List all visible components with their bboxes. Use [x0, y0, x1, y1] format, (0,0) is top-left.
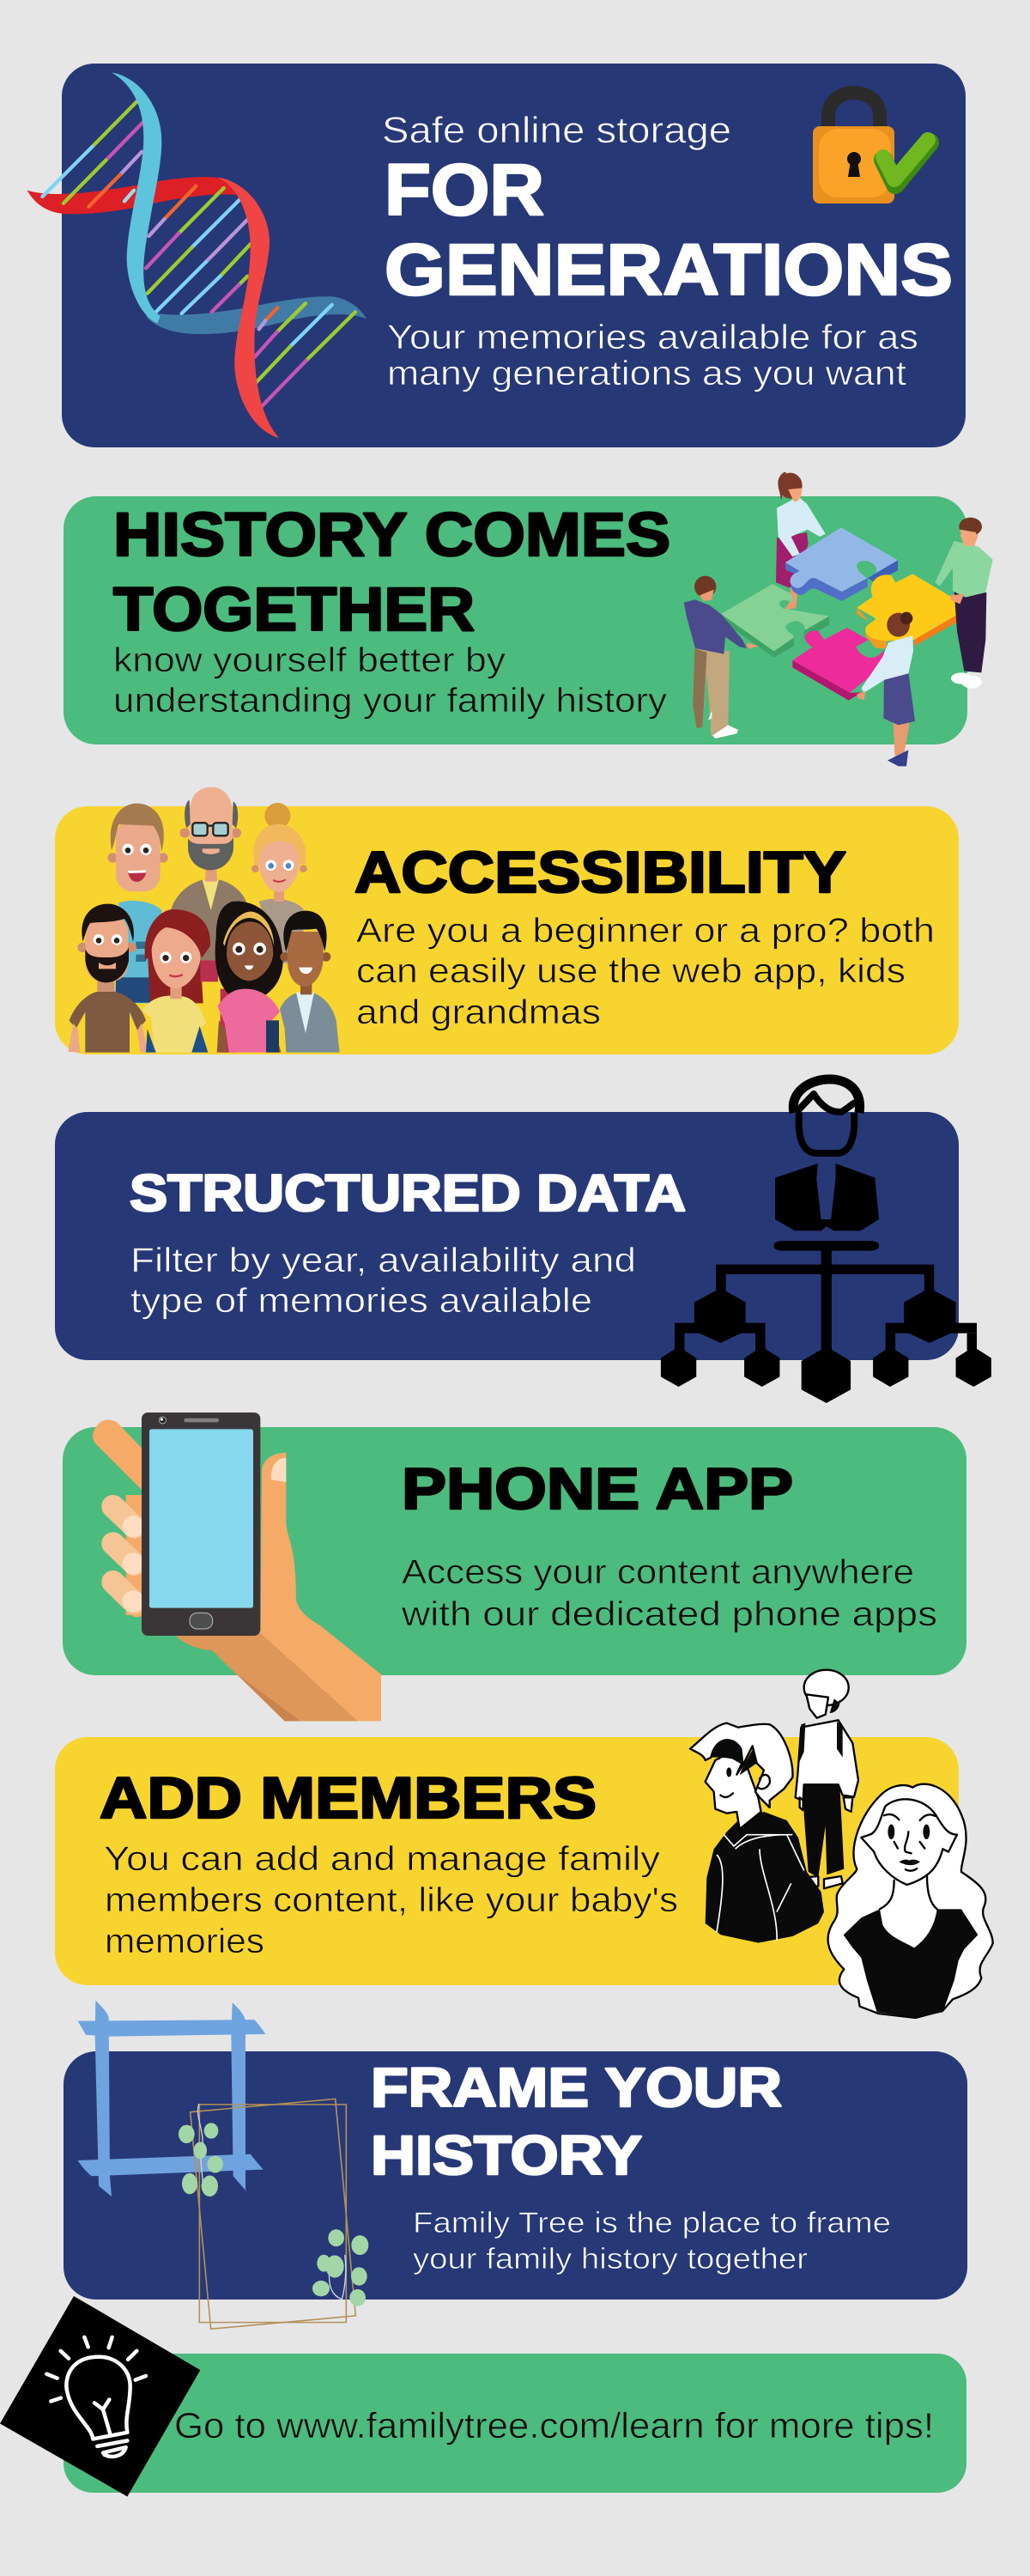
panel: frame your history: [64, 2001, 967, 2329]
text: frame description: Family Tree is the place to frame: [413, 2207, 891, 2239]
text: phone description: [401, 1553, 937, 1633]
text: accessibility description: [356, 912, 935, 1031]
text: filter description: type of memories available: [130, 1282, 592, 1320]
boy in black hoodie: [690, 1723, 824, 1943]
heading: frame your history: FRAME YOUR: [371, 2057, 782, 2118]
panel: history comes together: [64, 472, 993, 766]
older man with glasses: [171, 878, 246, 960]
illustration: team assembling puzzle: [684, 472, 993, 766]
heading: accessibility: ACCESSIBILITY: [354, 840, 846, 905]
panel: add members: [55, 1670, 993, 2018]
text: frame description: your family history together: [413, 2243, 808, 2275]
bottom woman: [894, 721, 910, 757]
heading: history comes together: HISTORY COMES: [113, 501, 670, 569]
blue puzzle piece: [785, 527, 898, 601]
icon: person and hierarchy tree: [661, 1079, 991, 1403]
panel: phone app: [63, 1413, 966, 1721]
heading: for: FOR: [385, 149, 544, 230]
blonde woman: [259, 899, 303, 963]
panel: accessibility: [55, 787, 959, 1054]
heading: frame your history: HISTORY: [371, 2124, 642, 2186]
top woman upper body: [777, 496, 826, 556]
icon: padlock with check: [813, 93, 930, 204]
right man: [954, 591, 986, 672]
standing man: [796, 1670, 858, 1888]
text: memories description: [387, 319, 918, 392]
green puzzle piece: [721, 584, 829, 658]
text: filter description: [130, 1242, 636, 1320]
icon: DNA helix: [27, 72, 367, 438]
text: accessibility description: and grandmas: [356, 993, 601, 1031]
heading: history comes together: [113, 501, 670, 644]
heading: frame your history: [371, 2057, 782, 2186]
magenta puzzle piece: [792, 628, 884, 701]
heading: add members: ADD MEMBERS: [100, 1765, 597, 1831]
heading: generations: GENERATIONS: [385, 229, 953, 310]
text: memories description: Your memories available for as: [387, 319, 918, 356]
heading: history comes together: TOGETHER: [113, 576, 475, 644]
yellow puzzle piece: [857, 574, 969, 649]
text: add members description: [104, 1840, 678, 1960]
long haired woman: [828, 1784, 993, 2018]
text: memories description: many generations as you want: [387, 355, 906, 392]
text: add members description: You can add and manage family: [104, 1840, 660, 1878]
illustration: black and white family: [690, 1670, 993, 2018]
text: add members description: members content, like your baby's: [105, 1881, 678, 1919]
illustration: blue and gold frames with leaves: [78, 2001, 368, 2329]
man with striped shirt: [114, 901, 163, 1003]
panel: learn more: [0, 2296, 966, 2496]
text: phone description: with our dedicated phone apps: [401, 1595, 937, 1633]
text: filter description: Filter by year, availability and: [130, 1242, 636, 1279]
text: know yourself: [113, 641, 667, 720]
top woman lower body: [776, 532, 809, 590]
text: learn more link: Go to www.familytree.com/learn for more tips!: [174, 2405, 934, 2445]
heading: structured data: STRUCTURED DATA: [130, 1164, 686, 1222]
text: know yourself: know yourself better by: [113, 641, 506, 679]
icon: light bulb on black square: [0, 2296, 200, 2496]
text: know yourself: understanding your family history: [113, 682, 667, 720]
panel: structured data: [55, 1079, 991, 1403]
illustration: hand holding phone: [93, 1413, 381, 1721]
bearded man: [70, 990, 146, 1053]
red haired woman: [148, 949, 203, 1003]
heading: phone app: PHONE APP: [402, 1456, 793, 1522]
panel: for generations: [27, 64, 966, 447]
text: add members description: memories: [105, 1923, 264, 1960]
text: accessibility description: can easily use the web app, kids: [356, 952, 906, 990]
dark haired woman: [215, 902, 283, 994]
text: safe online storage: Safe online storage: [382, 110, 731, 151]
text: frame description: [413, 2207, 891, 2275]
text: phone description: Access your content anywhere: [402, 1553, 914, 1591]
smiling man: [266, 1020, 279, 1053]
text: accessibility description: Are you a beginner or a pro? both: [356, 912, 935, 950]
illustration: group of family members: [68, 787, 340, 1053]
left man: [693, 648, 730, 736]
